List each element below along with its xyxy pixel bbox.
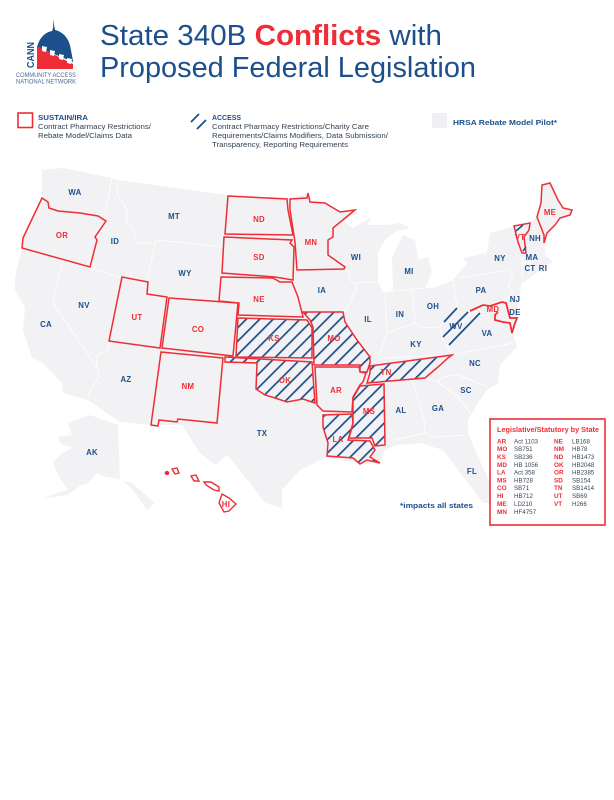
legislative table: LA	[497, 470, 506, 477]
legislative table: MS	[497, 477, 507, 484]
land: contiguous states	[15, 168, 572, 508]
legend: sustain/ira: Contract Pharmacy Restrictions/	[38, 122, 151, 131]
red state labels: MO	[327, 334, 341, 343]
legislative table: HB 1056	[514, 462, 539, 469]
legislative table: HB712	[514, 493, 533, 500]
blue state labels: OH	[427, 302, 439, 311]
legislative table: HF4757	[514, 509, 537, 516]
blue state labels: IA	[318, 286, 326, 295]
blue state labels: IL	[364, 315, 372, 324]
red state labels: KS	[268, 334, 280, 343]
red state labels: MD	[487, 305, 499, 314]
legend: sustain/ira: Rebate Model/Claims Data	[38, 131, 132, 140]
legislative table: SB1414	[572, 485, 595, 492]
blue state labels: CT	[524, 264, 536, 273]
blue state labels: NJ	[510, 295, 520, 304]
blue state labels: RI	[539, 264, 547, 273]
legislative table: HB2048	[572, 462, 595, 469]
red outlined states: SUSTAIN/IRA	[22, 183, 572, 426]
logo: NATIONAL NETWORK	[16, 80, 76, 86]
legislative table: HB2385	[572, 470, 595, 477]
blue state labels: NV	[78, 301, 90, 310]
red state labels: NE	[253, 295, 265, 304]
blue state labels: FL	[467, 467, 477, 476]
legislative table: NM	[554, 446, 564, 453]
blue state labels: NY	[494, 254, 506, 263]
legislative table: OK	[554, 462, 564, 469]
legislative table: MN	[497, 509, 507, 516]
legend: access: Contract Pharmacy Restrictions/Charity Care	[212, 122, 369, 131]
legislative table: SD	[554, 477, 563, 484]
blue state labels: WI	[351, 253, 361, 262]
legend: hrsa: HRSA Rebate Model Pilot*	[453, 118, 557, 127]
legislative table: H266	[572, 501, 587, 508]
legislative table: LD210	[514, 501, 533, 508]
title: State 340B Conflicts with	[100, 20, 442, 52]
legislative table: Act 358	[514, 470, 536, 477]
legend: hrsa	[432, 113, 557, 128]
legend: access: Requirements/Claims Modifiers, Data Submission/	[212, 131, 388, 140]
blue state labels	[40, 188, 547, 476]
red state labels: OK	[279, 376, 291, 385]
legislative table: MO	[497, 446, 507, 453]
land: alaska	[43, 415, 155, 510]
blue state labels: WA	[68, 188, 82, 197]
red state labels: WV	[449, 322, 463, 331]
red state labels: AR	[330, 386, 342, 395]
blue state labels: IN	[396, 310, 404, 319]
legislative table: HI	[497, 493, 504, 500]
blue state labels: CA	[40, 320, 52, 329]
blue state labels: MT	[168, 212, 180, 221]
legend: access: ACCESS	[212, 113, 241, 122]
blue state labels: GA	[432, 404, 444, 413]
legislative table: ME	[497, 501, 507, 508]
red state labels: TN	[380, 368, 392, 377]
legend: sustain/ira: SUSTAIN/IRA	[38, 113, 88, 122]
red state labels: CO	[192, 325, 204, 334]
legislative table: HB728	[514, 477, 533, 484]
blue state labels: DE	[509, 308, 521, 317]
blue state labels: AK	[86, 448, 98, 457]
blue state labels: NC	[469, 359, 481, 368]
legislative table: LB168	[572, 438, 590, 446]
logo	[16, 19, 76, 86]
red state labels: VT	[515, 233, 525, 242]
legislative table: HB78	[572, 446, 588, 453]
legislative table: SB751	[514, 446, 533, 453]
title	[100, 20, 476, 84]
red state labels	[56, 208, 556, 509]
red state labels: ND	[253, 215, 265, 224]
red state labels: OR	[56, 231, 68, 240]
blue state labels: AZ	[120, 375, 132, 384]
map of the United States	[15, 168, 572, 512]
blue state labels: MI	[404, 267, 414, 276]
legislative table: TN	[554, 485, 563, 492]
blue state labels: KY	[410, 340, 422, 349]
blue state labels: TX	[257, 429, 268, 438]
red state labels: HI	[222, 500, 230, 509]
legislative table	[490, 419, 605, 525]
title: Proposed Federal Legislation	[100, 52, 476, 84]
legislative table: HB1473	[572, 454, 595, 461]
legislative table: ND	[554, 454, 564, 461]
legislative table: OR	[554, 470, 564, 477]
legislative table: CO	[497, 485, 507, 492]
blue state labels: SC	[460, 386, 472, 395]
hatched states: ACCESS	[225, 308, 480, 464]
legislative table: MD	[497, 462, 507, 469]
legislative table: UT	[554, 493, 563, 500]
logo: CANN	[26, 42, 37, 68]
legend: access	[191, 113, 388, 149]
red state labels: NM	[182, 382, 194, 391]
blue state labels: PA	[476, 286, 486, 295]
legislative table: SB236	[514, 454, 533, 461]
blue state labels: ID	[111, 237, 119, 246]
legislative table: AR	[497, 438, 507, 446]
footnote: *impacts all states	[400, 501, 473, 510]
red state labels: MN	[305, 238, 317, 247]
red state labels: ME	[544, 208, 556, 217]
legislative table: VT	[554, 501, 562, 508]
blue state labels: AL	[396, 406, 406, 415]
blue state labels: MA	[526, 253, 538, 262]
red state labels: MS	[363, 407, 375, 416]
red state labels: UT	[132, 313, 142, 322]
legislative table: Legislative/Statutory by State	[497, 427, 599, 434]
legislative table: SB69	[572, 493, 588, 500]
hawaii	[165, 468, 236, 512]
blue state labels: WY	[178, 269, 192, 278]
legislative table: Act 1103	[514, 438, 539, 446]
logo: COMMUNITY ACCESS	[16, 73, 76, 79]
red state labels: SD	[253, 253, 265, 262]
legend: sustain/ira	[18, 113, 151, 140]
legend: access: Transparency, Reporting Requirements	[212, 140, 348, 149]
legislative table: SB71	[514, 485, 530, 492]
legislative table: KS	[497, 454, 507, 461]
legislative table: NE	[554, 438, 564, 446]
red state labels: LA	[332, 435, 344, 444]
blue state labels: VA	[482, 329, 492, 338]
blue state labels: NH	[529, 234, 541, 243]
legislative table: SB154	[572, 477, 591, 484]
